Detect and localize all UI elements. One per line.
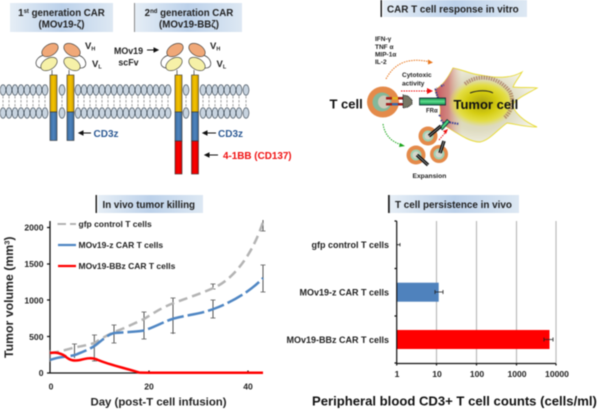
heading: T cell persistence in vivo: T cell persistence in vivo	[395, 200, 512, 211]
panel: 1st generation CAR heading	[10, 3, 113, 32]
category labels: MOv19-BBz CAR T cells	[286, 335, 389, 345]
label: cytotoxic activity	[402, 72, 432, 88]
label: MOv19 scFv	[114, 46, 143, 68]
axes	[394, 221, 556, 366]
x axis labels: 40	[243, 382, 253, 392]
label: VH / VL second: V	[216, 59, 223, 70]
legend: tumor chart	[58, 219, 176, 271]
panel: 2nd generation CAR heading: nd	[150, 9, 158, 15]
legend: tumor chart: MOv19-BBz CAR T cells	[78, 261, 176, 271]
label: VH / VL first: H	[91, 46, 95, 52]
arrow: scFv pointer	[147, 48, 158, 52]
y axis labels: 2000	[24, 222, 44, 232]
label: VH / VL first: L	[98, 64, 102, 70]
y axis labels: 1000	[24, 296, 44, 306]
FRα target bar	[420, 98, 446, 105]
label: VH / VL second: V	[210, 41, 216, 52]
x axis labels	[49, 382, 253, 392]
T cell with CAR	[367, 86, 412, 118]
tumor cell	[435, 68, 537, 142]
y axis title: 3	[2, 241, 12, 245]
cytokine list: IL-2	[375, 59, 387, 66]
label: Expansion: Expansion	[412, 173, 446, 180]
bar chart: T cell persistence	[286, 221, 569, 379]
y axis labels: 500	[29, 332, 44, 342]
bar: MOv19-BBz	[397, 330, 550, 349]
category labels: MOv19-z CAR T cells	[299, 288, 389, 298]
bar: MOv19-z	[397, 283, 439, 302]
panel: 1st generation CAR heading: st	[24, 9, 29, 15]
heading: T cell persistence in vivo	[388, 195, 519, 213]
label: FRα: FRα	[426, 108, 438, 114]
small FRα receptor	[440, 119, 450, 130]
heading: In vivo tumor killing: In vivo tumor killing	[102, 200, 195, 211]
label: cytotoxic activity: Cytotoxic	[402, 72, 432, 79]
error bars	[50, 220, 263, 362]
x axis labels: 0	[49, 382, 54, 392]
label: cytotoxic activity: activity	[402, 80, 425, 88]
cell membrane	[0, 85, 249, 118]
cytokine list	[375, 36, 396, 66]
x axis labels: 10000	[545, 369, 569, 379]
line chart: tumor volume	[2, 220, 266, 392]
category labels: gfp control T cells	[311, 240, 389, 250]
series: gfp control	[50, 222, 263, 353]
label: T cell: T cell	[330, 96, 363, 112]
y axis labels	[24, 222, 44, 378]
x axis labels: 1	[395, 369, 400, 379]
arrow and label: 4-1BB: 4-1BB (CD137)	[223, 151, 292, 162]
x axis labels: 1000	[507, 369, 527, 379]
label: VH / VL second: L	[223, 64, 227, 70]
axes	[47, 221, 263, 373]
grid lines	[436, 221, 556, 363]
legend: tumor chart: MOv19-z CAR T cells	[78, 240, 163, 250]
series: MOv19-BBz	[50, 353, 263, 373]
label: VH / VL second: H	[216, 46, 220, 52]
arrow and label: CD3z first	[79, 129, 119, 140]
label: VH / VL first: V	[92, 59, 98, 70]
x axis labels: 20	[144, 382, 154, 392]
arrow: red to tumor	[439, 129, 448, 140]
label: MOv19 scFv: scFv	[118, 58, 139, 68]
heading: CAR T cell response in vitro	[380, 0, 527, 17]
arrow: cytotoxic red	[401, 88, 433, 94]
x axis title: bar chart: Peripheral blood CD3+ T cell counts (cells/ml)	[312, 394, 597, 408]
x axis labels: 100	[470, 369, 484, 379]
category labels	[286, 240, 389, 345]
series: MOv19-z	[50, 278, 263, 360]
label: Tumor cell: Tumor cell	[454, 97, 518, 112]
arrow and label: CD3z first: CD3z	[94, 129, 119, 140]
label: MOv19 scFv: MOv19	[114, 46, 143, 56]
x axis title: Day (post-T cell infusion)	[90, 396, 227, 408]
2nd generation CAR receptor	[161, 40, 211, 174]
y axis labels: 0	[39, 368, 44, 378]
label: VH / VL second	[210, 41, 227, 70]
arrow: green expansion	[383, 124, 405, 147]
cytokine list: IFN-γ	[375, 36, 392, 43]
y axis title: )	[2, 237, 16, 241]
panel: 1st generation CAR heading: generation CAR	[29, 8, 105, 19]
cytokine list: MIP-1α	[375, 52, 396, 58]
panel: 2nd generation CAR heading: (MOv19-BBζ)	[159, 20, 219, 30]
heading: In vivo tumor killing	[96, 195, 203, 213]
panel: 2nd generation CAR heading: generation CAR	[157, 8, 233, 19]
cytokine list: TNF α	[375, 44, 393, 51]
panel: 2nd generation CAR heading	[134, 3, 242, 32]
panel: 2nd generation CAR heading: 2	[145, 8, 150, 19]
1st generation CAR receptor	[36, 40, 86, 140]
legend: tumor chart: gfp control T cells	[78, 219, 152, 229]
arrow and label: CD3z second	[203, 129, 243, 140]
expanded T cells	[406, 126, 448, 165]
label: VH / VL first: V	[85, 41, 91, 52]
y axis title: Tumor volume (mm	[2, 245, 16, 358]
y axis labels: 1500	[24, 259, 44, 269]
x axis labels	[395, 369, 569, 379]
label: VH / VL first	[85, 41, 102, 70]
heading: CAR T cell response in vitro: CAR T cell response in vitro	[387, 4, 519, 16]
x axis labels: 10	[432, 369, 442, 379]
error bars	[397, 243, 553, 342]
panel: 1st generation CAR heading: (MOv19-ζ)	[39, 20, 84, 30]
arrow: cytokine orange	[386, 60, 431, 79]
arrow and label: CD3z second: CD3z	[218, 129, 243, 140]
panel: 1st generation CAR heading: 1	[18, 8, 24, 19]
